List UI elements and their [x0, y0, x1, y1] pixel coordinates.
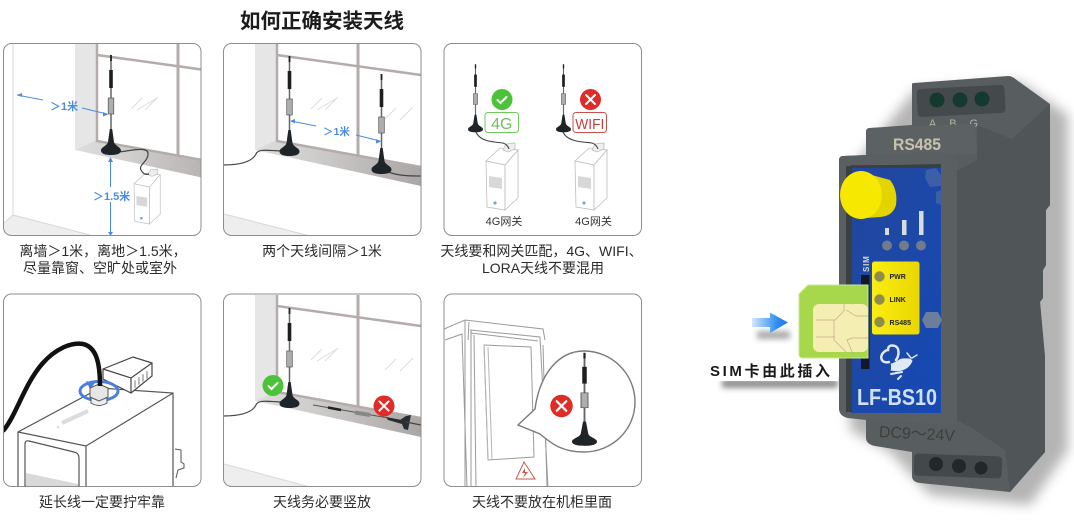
title: 如何正确安装天线	[240, 10, 404, 33]
cable	[3, 344, 100, 431]
icon: cross	[550, 395, 573, 417]
icon: upright antenna	[280, 308, 300, 408]
cable	[118, 149, 149, 174]
caption: tighten: 延长线一定要拧牢靠	[39, 494, 165, 510]
magnifier bubble	[518, 351, 635, 452]
product shadow	[850, 82, 1068, 505]
gateways	[486, 143, 518, 210]
antenna connector cap	[840, 171, 896, 219]
blue face	[851, 165, 941, 413]
connector nut	[91, 398, 107, 406]
SIM label: SIM	[862, 255, 871, 272]
label: gateway: 4G网关	[486, 214, 522, 228]
gateway top	[18, 388, 173, 486]
top terminal	[916, 85, 1006, 117]
cabinet outline	[444, 320, 548, 487]
tag: WIFI: WIFI	[575, 116, 604, 133]
panel: distance from wall and ground: ＞1米	[50, 99, 78, 113]
top marks	[62, 411, 88, 423]
icon: antenna one	[280, 56, 300, 156]
yellow LED panel	[872, 262, 920, 334]
signal bars	[885, 211, 924, 235]
logo: bee	[881, 345, 917, 379]
SIM slot	[861, 275, 870, 369]
body silhouette	[839, 76, 1050, 492]
tag: 4G: 4G	[491, 116, 512, 133]
floor	[3, 215, 90, 235]
terminal letters: ABG	[929, 118, 991, 130]
panel: distance from wall and ground	[3, 43, 202, 236]
caption: matching: LORA天线不要混用	[482, 260, 604, 276]
arrow: height from floor	[110, 162, 111, 232]
panel: distance from wall and ground: ＞1.5米	[93, 189, 130, 203]
label: insert SIM here	[708, 360, 838, 388]
icon: good antenna	[468, 64, 483, 132]
icon: bad antenna	[556, 64, 571, 132]
antenna port box	[103, 357, 152, 393]
label: insert SIM here: SIM卡由此插入	[710, 362, 830, 380]
blue rotation ring	[80, 382, 118, 400]
caption: matching: 天线要和网关匹配，4G、WIFI、	[440, 243, 643, 259]
side clip	[175, 449, 184, 478]
status dots	[882, 240, 926, 250]
icon: antenna two	[372, 74, 392, 174]
icon: antenna	[101, 55, 121, 155]
yellow LED panel: RS485	[890, 320, 911, 327]
SIM card	[799, 285, 868, 358]
product: LF-BS10 gateway	[839, 76, 1068, 505]
gateway screen	[25, 441, 79, 486]
yellow LED panel: PWR	[890, 274, 906, 281]
panel: two antenna spacing: ＞1米	[323, 125, 350, 138]
caption: distance: 离墙＞1米，离地＞1.5米，	[19, 243, 187, 259]
RS485 label: RS485	[893, 136, 941, 154]
tag: 4G	[485, 112, 518, 133]
icon: cross	[374, 396, 394, 416]
icon: high voltage warning	[516, 462, 535, 479]
voltage label: DC9～24V	[879, 424, 956, 445]
front housing	[839, 152, 957, 424]
panel: keep antenna upright	[223, 294, 421, 487]
arrow: spacing	[291, 121, 380, 141]
caption: distance: 尽量靠窗、空旷处或室外	[23, 260, 177, 276]
panel: not in cabinet	[444, 294, 642, 487]
panel: tighten cable	[3, 294, 201, 486]
yellow LED panel: LINK	[890, 297, 906, 304]
caption: upright: 天线务必要竖放	[273, 494, 371, 510]
arrow: insert SIM	[752, 312, 790, 339]
model label: LF-BS10	[857, 384, 937, 410]
cable	[223, 401, 285, 416]
icon: lying antenna	[313, 405, 421, 430]
cables	[223, 150, 285, 165]
cables	[476, 132, 509, 149]
icon: check	[492, 89, 512, 110]
label: gateway: 4G网关	[575, 214, 612, 228]
bottom terminal	[914, 453, 1002, 479]
icon: check	[262, 375, 284, 396]
icon: cross	[580, 89, 601, 110]
panel: two antenna spacing	[223, 44, 422, 236]
RS485 block	[866, 124, 977, 156]
caption: spacing: 两个天线间隔＞1米	[262, 243, 382, 259]
panel: antenna matching	[444, 44, 642, 236]
arrow: distance to wall	[17, 95, 107, 114]
caption: cabinet: 天线不要放在机柜里面	[472, 494, 612, 510]
icon: antenna	[572, 353, 597, 446]
icon: gateway	[134, 169, 160, 224]
